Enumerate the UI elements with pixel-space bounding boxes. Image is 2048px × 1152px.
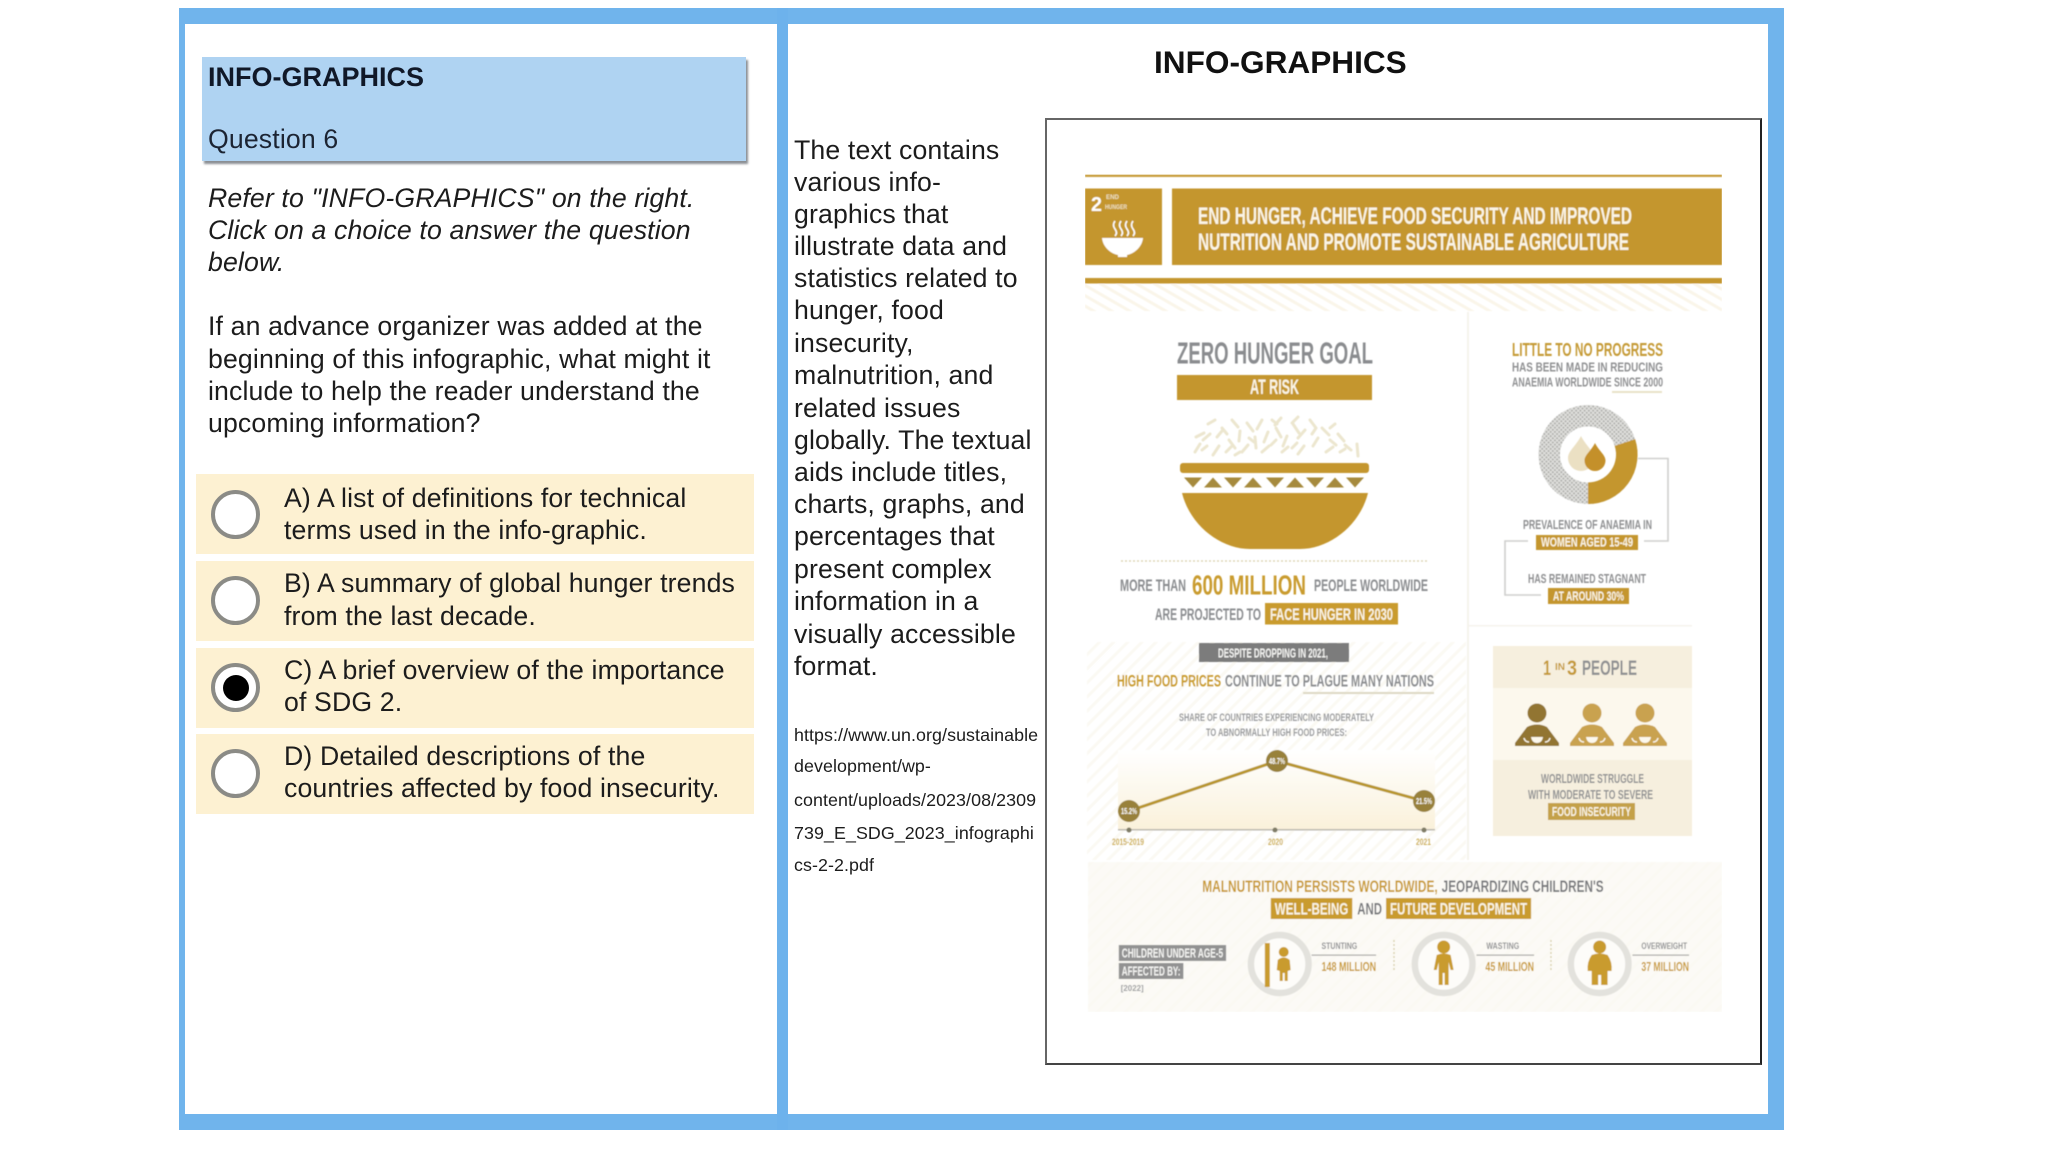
description text: statistics related to xyxy=(794,263,1018,293)
line chart xyxy=(1112,750,1435,847)
description text: globally. The textual xyxy=(794,425,1032,455)
description text: hunger, food xyxy=(794,295,944,325)
zero hunger goal section: ZERO HUNGER GOAL xyxy=(1177,336,1373,370)
description text: insecurity, xyxy=(794,328,914,358)
outer blue frame xyxy=(179,8,1784,1130)
food prices section xyxy=(1087,642,1466,860)
description text: related issues xyxy=(794,393,960,423)
instructions: below. xyxy=(208,247,284,277)
food prices section: HIGH FOOD PRICES xyxy=(1117,672,1221,690)
malnutrition section: JEOPARDIZING CHILDREN'S xyxy=(1442,877,1604,896)
1 in 3 people panel: 1 xyxy=(1543,657,1551,680)
donut chart xyxy=(1549,416,1627,493)
600 million callout: PEOPLE WORLDWIDE xyxy=(1314,576,1428,595)
anaemia section: AT AROUND 30% xyxy=(1553,588,1624,604)
overweight figure xyxy=(1632,941,1689,974)
description text: percentages that xyxy=(794,521,995,551)
line chart: 48.7% xyxy=(1269,757,1285,766)
icon: person eating, highlighted xyxy=(1515,704,1559,746)
description text: illustrate data and xyxy=(794,231,1007,261)
option B: from the last decade. xyxy=(284,601,536,631)
1 in 3 people panel: IN xyxy=(1555,662,1565,673)
SDG 2 icon: HUNGER xyxy=(1105,205,1128,211)
food prices section: TO ABNORMALLY HIGH FOOD PRICES: xyxy=(1206,727,1347,739)
source URL xyxy=(794,725,1038,875)
1 in 3 people panel: WORLDWIDE STRUGGLE xyxy=(1541,772,1644,786)
question text: beginning of this infographic, what might it xyxy=(208,344,711,374)
malnutrition section: MALNUTRITION PERSISTS WORLDWIDE, xyxy=(1202,877,1438,896)
malnutrition section xyxy=(1088,862,1722,1012)
children label: [2022] xyxy=(1121,984,1144,993)
1 in 3 people panel: 3 xyxy=(1567,657,1577,680)
option D: D) Detailed descriptions of the xyxy=(284,741,645,771)
description text: aids include titles, xyxy=(794,457,1007,487)
centre divider xyxy=(777,8,788,1130)
anaemia section: WOMEN AGED 15-49 xyxy=(1541,534,1633,550)
wasting figure xyxy=(1476,941,1534,974)
anaemia section: LITTLE TO NO PROGRESS xyxy=(1512,340,1663,360)
children label: AFFECTED BY: xyxy=(1122,964,1180,979)
option D: countries affected by food insecurity. xyxy=(284,773,720,803)
description text: malnutrition, and xyxy=(794,360,993,390)
SDG 2 icon: 2 xyxy=(1091,194,1102,216)
SDG header band xyxy=(1085,174,1722,311)
instructions: Refer to "INFO-GRAPHICS" on the right. xyxy=(208,183,694,213)
right panel title: INFO-GRAPHICS xyxy=(1154,44,1407,80)
option C selected: C) A brief overview of the importance xyxy=(284,655,725,685)
stunting figure: 148 MILLION xyxy=(1321,959,1376,974)
1 in 3 people panel xyxy=(1493,646,1692,836)
option B xyxy=(196,561,754,641)
1 in 3 people panel: WITH MODERATE TO SEVERE xyxy=(1528,788,1653,802)
banner: END HUNGER, ACHIEVE FOOD SECURITY AND IMPROVED xyxy=(1198,203,1632,230)
question text: include to help the reader understand the xyxy=(208,376,700,406)
panel: question header xyxy=(202,57,746,161)
line chart: 2021 xyxy=(1416,837,1431,847)
option A xyxy=(196,474,754,554)
instructions xyxy=(208,183,694,277)
option B: B) A summary of global hunger trends xyxy=(284,568,735,598)
header title: INFO-GRAPHICS xyxy=(208,62,424,92)
overweight figure: OVERWEIGHT xyxy=(1641,941,1687,951)
option D xyxy=(196,734,754,814)
malnutrition section: WELL-BEING xyxy=(1275,899,1348,919)
children label: CHILDREN UNDER AGE-5 xyxy=(1122,946,1223,961)
food prices section: CONTINUE TO PLAGUE MANY NATIONS xyxy=(1225,672,1434,690)
wasting figure: WASTING xyxy=(1486,941,1519,951)
banner xyxy=(1172,188,1722,265)
food prices section: SHARE OF COUNTRIES EXPERIENCING MODERATELY xyxy=(1179,712,1374,724)
option C selected: of SDG 2. xyxy=(284,687,402,717)
600 million callout: 600 MILLION xyxy=(1192,570,1306,600)
panel: infographic frame xyxy=(1045,118,1762,1065)
description text: graphics that xyxy=(794,199,948,229)
food prices section: DESPITE DROPPING IN 2021, xyxy=(1218,646,1328,660)
source URL: https://www.un.org/sustainable xyxy=(794,725,1038,745)
600 million callout: FACE HUNGER IN 2030 xyxy=(1270,605,1393,624)
stunting figure xyxy=(1312,941,1376,974)
icon: rice bowl xyxy=(1180,417,1369,549)
option A: terms used in the info-graphic. xyxy=(284,515,647,545)
source URL: content/uploads/2023/08/2309 xyxy=(794,790,1036,810)
description text: visually accessible xyxy=(794,619,1016,649)
option A: A) A list of definitions for technical xyxy=(284,483,686,513)
icon: wasting child xyxy=(1415,935,1472,993)
line chart: 21.5% xyxy=(1416,797,1432,806)
zero hunger goal section: AT RISK xyxy=(1250,376,1299,399)
source URL: development/wp- xyxy=(794,756,931,776)
description text: format. xyxy=(794,651,878,681)
description text xyxy=(794,135,1032,681)
600 million callout: MORE THAN xyxy=(1120,576,1186,595)
anaemia section: HAS REMAINED STAGNANT xyxy=(1528,571,1646,586)
description text: charts, graphs, and xyxy=(794,489,1025,519)
SDG 2 icon: END xyxy=(1106,195,1120,201)
600 million callout xyxy=(1120,570,1428,624)
anaemia section: HAS BEEN MADE IN REDUCING xyxy=(1512,360,1663,374)
line chart: 2020 xyxy=(1268,837,1283,847)
overweight figure: 37 MILLION xyxy=(1641,959,1689,974)
banner: NUTRITION AND PROMOTE SUSTAINABLE AGRICULTURE xyxy=(1198,229,1629,256)
instructions: Click on a choice to answer the question xyxy=(208,215,691,245)
1 in 3 people panel: PEOPLE xyxy=(1582,657,1637,680)
malnutrition section: AND xyxy=(1357,899,1382,919)
line chart: 2015-2019 xyxy=(1112,837,1144,847)
description text: information in a xyxy=(794,586,978,616)
icon: overweight child xyxy=(1571,935,1628,993)
question text: If an advance organizer was added at the xyxy=(208,311,703,341)
icon: stunting child xyxy=(1251,935,1309,993)
option C selected xyxy=(196,648,754,728)
zero hunger goal section xyxy=(1120,336,1428,624)
question text xyxy=(208,311,711,438)
question number: Question 6 xyxy=(208,124,338,154)
icon: person eating xyxy=(1623,704,1667,746)
1 in 3 people panel: FOOD INSECURITY xyxy=(1552,805,1631,819)
line chart: 15.2% xyxy=(1121,807,1137,816)
description text: present complex xyxy=(794,554,992,584)
source URL: 739_E_SDG_2023_infographi xyxy=(794,823,1034,843)
malnutrition section: FUTURE DEVELOPMENT xyxy=(1390,899,1528,919)
source URL: cs-2-2.pdf xyxy=(794,855,874,875)
description text: The text contains xyxy=(794,135,999,165)
question text: upcoming information? xyxy=(208,408,481,438)
anaemia section: PREVALENCE OF ANAEMIA IN xyxy=(1523,517,1652,532)
children label xyxy=(1119,945,1226,993)
stunting figure: STUNTING xyxy=(1321,941,1357,951)
600 million callout: ARE PROJECTED TO xyxy=(1155,605,1261,624)
anaemia section: ANAEMIA WORLDWIDE SINCE 2000 xyxy=(1512,374,1663,390)
description text: various info- xyxy=(794,167,941,197)
wasting figure: 45 MILLION xyxy=(1485,959,1534,974)
icon: person eating xyxy=(1570,704,1614,746)
anaemia section xyxy=(1505,340,1668,604)
SDG 2 icon xyxy=(1085,188,1162,265)
